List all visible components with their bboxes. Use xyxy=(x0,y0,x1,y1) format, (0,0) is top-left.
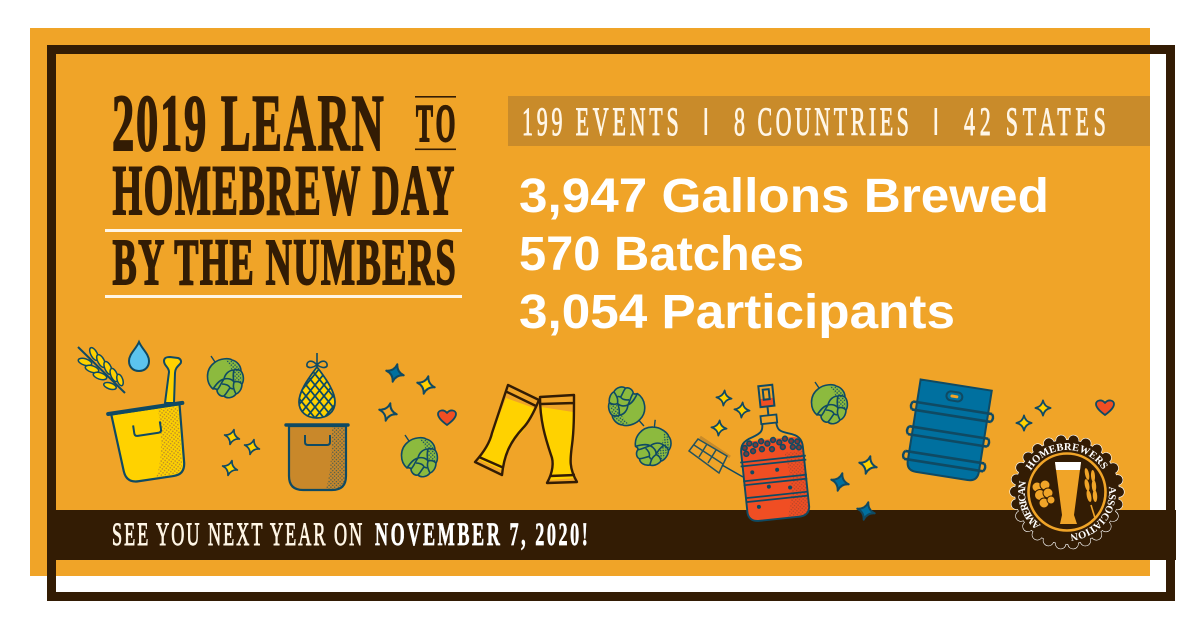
title block xyxy=(105,79,462,299)
title block: HOMEBREW DAY xyxy=(112,152,454,230)
icon: keg xyxy=(901,379,997,482)
icon: hop right xyxy=(812,382,847,424)
icon: wort chiller xyxy=(689,437,743,477)
footer message xyxy=(112,515,588,552)
logo hop xyxy=(1032,480,1055,508)
icon: sparkles middle xyxy=(377,362,437,423)
headline numbers: 3,947 Gallons Brewed xyxy=(519,170,1049,223)
right glass xyxy=(540,395,577,483)
logo pint glass xyxy=(1055,462,1081,524)
icon: brown pot with hop bag xyxy=(286,353,348,490)
logo lettering: HOMEBREWERS xyxy=(1025,443,1108,471)
icon: hops pair xyxy=(606,384,680,473)
footer band xyxy=(56,510,1176,560)
footer message: SEE YOU NEXT YEAR ON xyxy=(112,515,362,552)
title block: BY THE NUMBERS xyxy=(112,226,456,299)
headline numbers: 570 Batches xyxy=(519,228,804,281)
footer message: NOVEMBER 7, 2020! xyxy=(375,515,588,552)
title word: TO: TO xyxy=(416,94,455,152)
title block: 2019 LEARN xyxy=(112,79,384,169)
stats strip: 8 COUNTRIES xyxy=(734,99,909,144)
left glass xyxy=(475,385,539,475)
icon: hop middle xyxy=(402,435,437,477)
icon: water drop xyxy=(129,342,149,371)
icon: yellow pot xyxy=(108,403,193,484)
stats strip: 42 STATES xyxy=(964,99,1106,144)
icon: wheat xyxy=(77,346,125,393)
logo lettering: AMERICAN xyxy=(1018,480,1041,528)
headline numbers xyxy=(519,170,1049,339)
logo: American Homebrewers Association bottle cap xyxy=(1009,434,1125,550)
icon: heart right xyxy=(1096,400,1114,415)
icon: toasting beer glasses xyxy=(475,385,577,483)
stats strip xyxy=(508,96,1150,146)
stats strip: 199 EVENTS xyxy=(522,99,679,144)
icon: hop top-left xyxy=(208,356,243,398)
logo lettering xyxy=(1018,443,1116,541)
logo wheat xyxy=(1084,468,1098,518)
headline numbers: 3,054 Participants xyxy=(519,286,955,339)
icon: mash paddle xyxy=(164,357,181,403)
icon: sparkles right of carboy xyxy=(711,390,879,522)
foam xyxy=(742,435,802,457)
icon: heart middle xyxy=(438,410,456,425)
icon: carboy xyxy=(732,382,812,522)
icon: sparkles near keg xyxy=(1016,400,1051,431)
logo lettering: ASSOCIATION xyxy=(1071,486,1116,541)
icon: hop bag xyxy=(299,353,335,418)
icon: sparkles left xyxy=(221,428,261,477)
